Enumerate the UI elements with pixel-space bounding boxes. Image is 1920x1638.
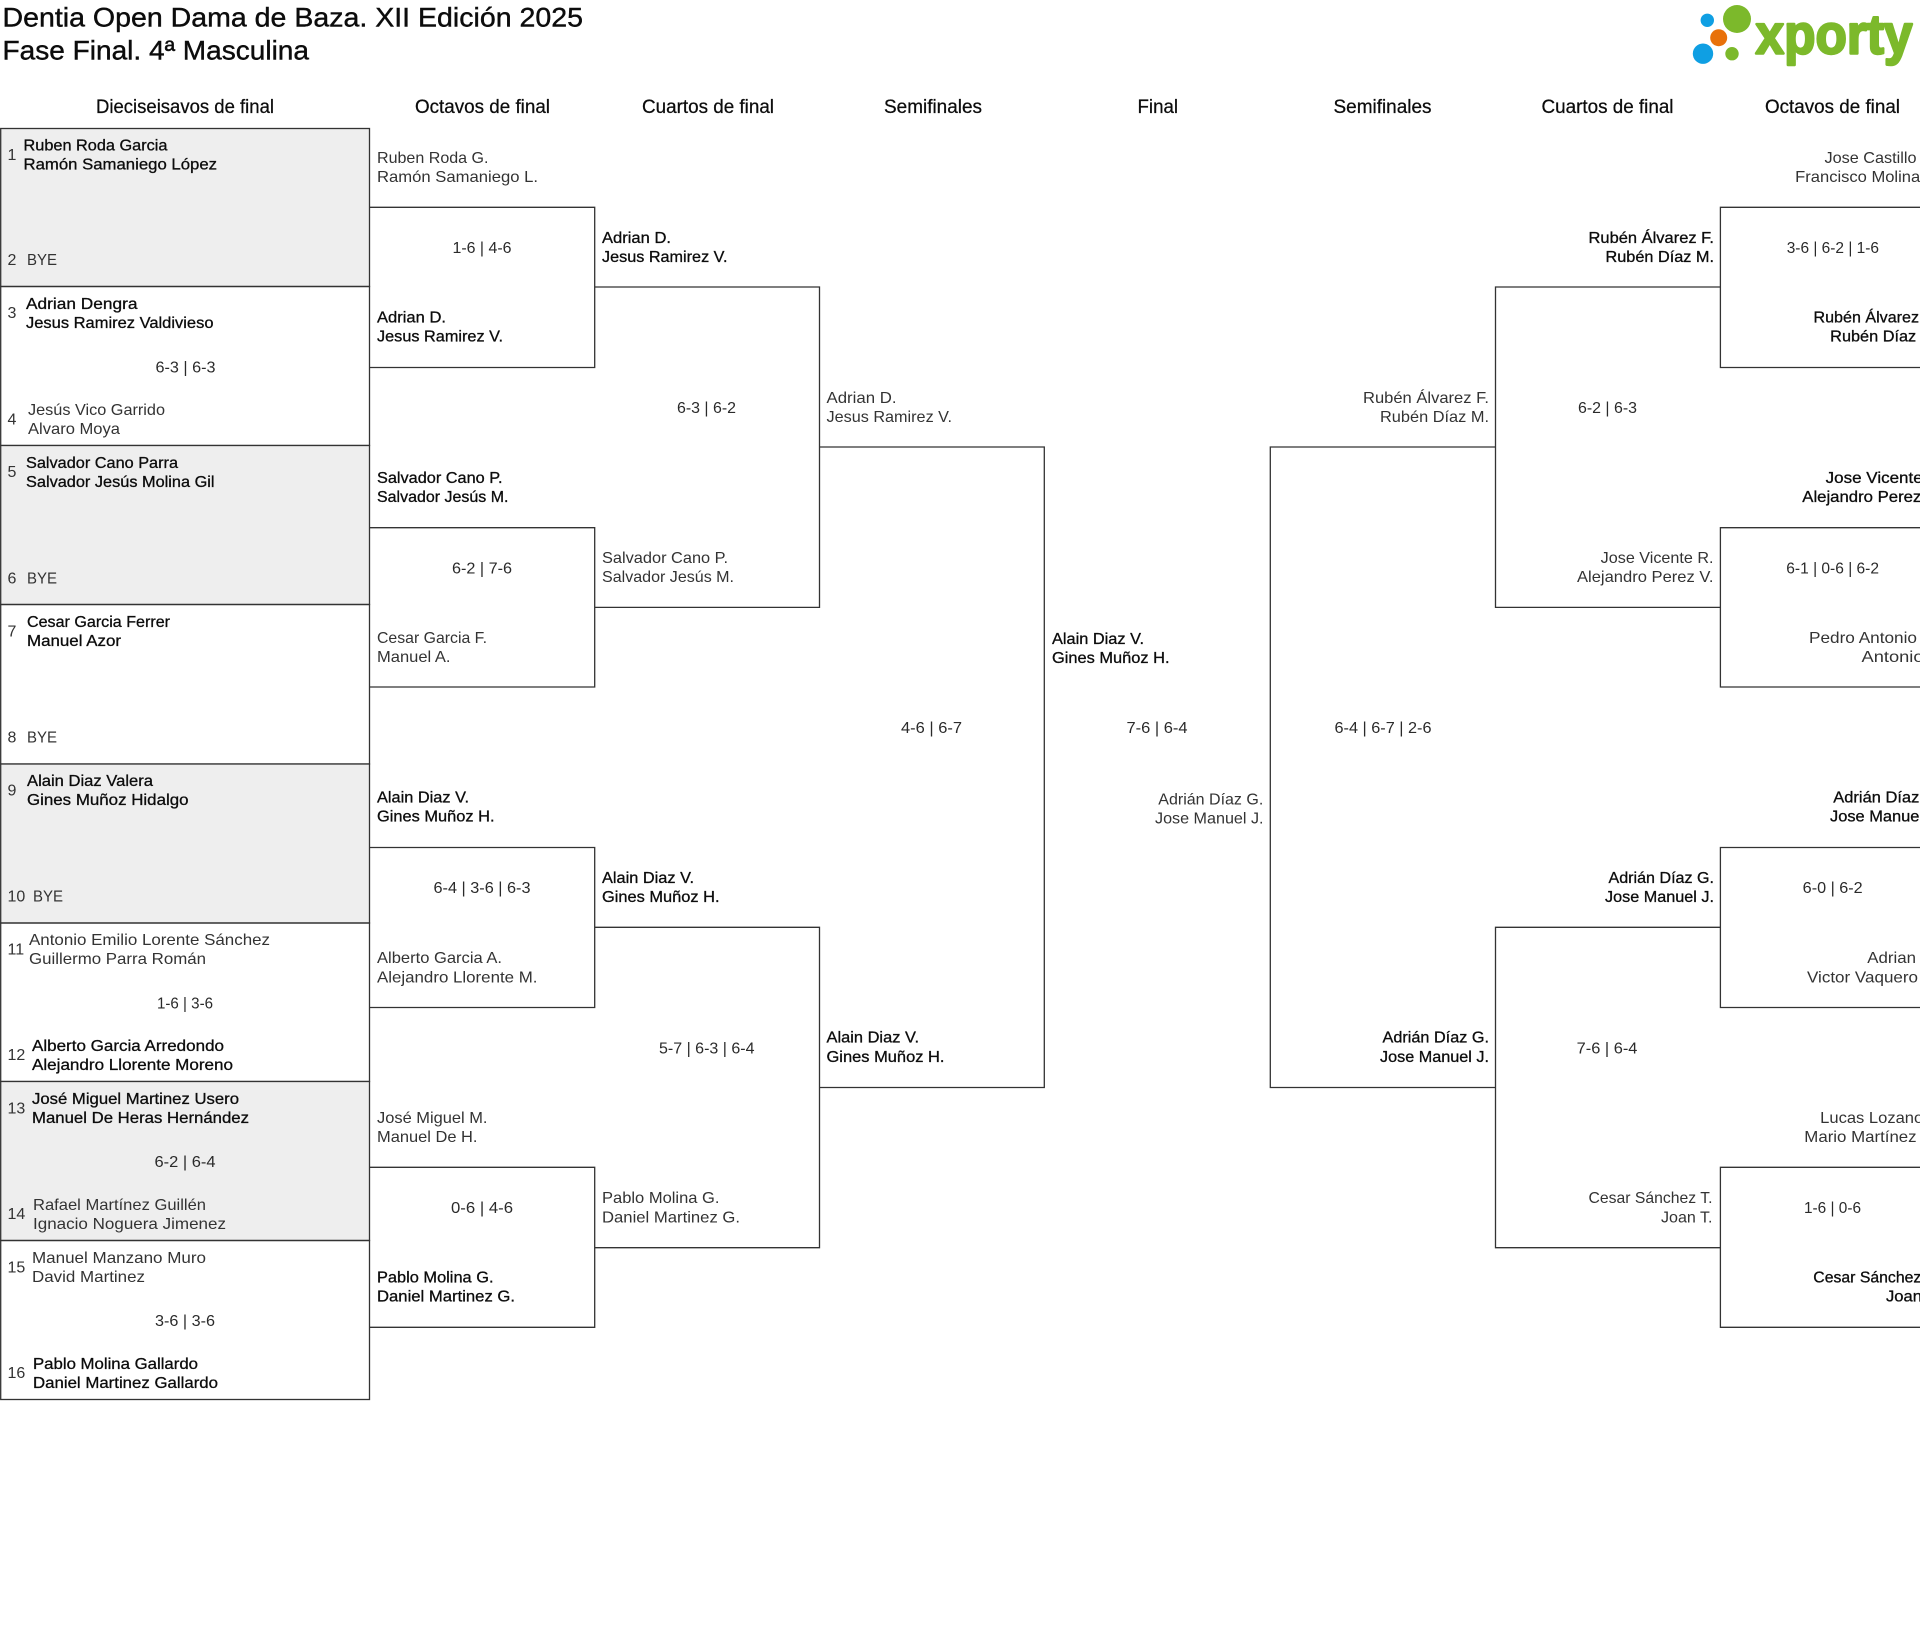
column: Semifinales (left): Jesus Ramirez V. [826,409,952,426]
match 5-6: 5 [8,464,16,481]
round headings: Cuartos de final [642,97,774,118]
match: Jose Castillo / Rubén Álvarez: Rubén Álvarez [1814,308,1919,326]
match: Adrián Díaz / Adrian [1720,790,1920,1008]
match 3-4: 6-3 | 6-3 [156,360,216,376]
match 5-6 [1,446,369,604]
match 7-8 [1,604,369,764]
match: Alain Diaz / Pablo Molina: Gines Muñoz H. [602,889,720,906]
match: Adrian D. / Salvador Cano: Salvador Jesús M. [602,569,734,586]
match: Ruben Roda / Adrian D. [370,150,595,368]
match 9-10: BYE [33,888,63,906]
match: Lucas Lozano / Cesar Sánchez: Joan [1886,1288,1920,1306]
match 11-12: Guillermo Parra Román [29,951,206,968]
match: Adrián Díaz / Cesar Sánchez: Cesar Sánchez T. [1588,1190,1712,1207]
column: Final: Jose Manuel J. [1155,810,1264,828]
match 3-4: Adrian Dengra [26,296,138,313]
match: Adrián Díaz / Cesar Sánchez: Adrián Díaz G. [1608,870,1714,887]
title: Dentia Open Dama de Baza. XII Edición 2025 [2,2,583,32]
match 13-14: Ignacio Noguera Jimenez [33,1216,226,1233]
match 11-12: 11 [8,942,24,958]
match: José Miguel / Pablo Molina: Pablo Molina G. [377,1270,494,1286]
match 11-12: Alberto Garcia Arredondo [32,1038,224,1055]
match: Alain Diaz / Pablo Molina: Alain Diaz V. [602,870,694,887]
round headings: Semifinales [1334,97,1432,118]
match: Salvador Cano / Cesar Garcia [370,470,595,687]
match 13-14 [1,1082,369,1240]
column: Semifinales (left): 4-6 | 6-7 [901,720,962,737]
column: Final: Adrián Díaz G. [1158,792,1263,808]
match: Alain Diaz / Alberto Garcia: Alberto Garcia A. [377,950,502,967]
match: Jose Castillo / Rubén Álvarez: Jose Castillo [1824,150,1917,167]
match: Rubén Álvarez / Jose Vicente [1496,228,1720,607]
match: Adrián Díaz / Adrian: Adrián Díaz [1833,790,1919,806]
match 11-12 [1,923,369,1082]
match: José Miguel / Pablo Molina [370,1110,595,1327]
match 13-14: 14 [8,1206,25,1223]
round headings: Semifinales [884,97,982,118]
match 5-6: Salvador Cano Parra [26,455,178,472]
column: Octavos de final (right) [1720,150,1920,1327]
match: Ruben Roda / Adrian D.: Ramón Samaniego L. [377,169,538,186]
match: Ruben Roda / Adrian D.: Jesus Ramirez V. [377,328,503,346]
column: Semifinales (right): Rubén Díaz M. [1380,409,1489,426]
match 15-16: Manuel Manzano Muro [32,1250,206,1267]
match 11-12: Antonio Emilio Lorente Sánchez [29,932,270,949]
column: Final [1052,631,1264,828]
match: Salvador Cano / Cesar Garcia: Salvador Cano P. [377,470,502,487]
round headings: Dieciseisavos de final [96,97,274,118]
match: Rubén Álvarez / Jose Vicente: 6-2 | 6-3 [1578,400,1637,417]
match 9-10: 10 [8,888,25,906]
match: Adrian D. / Salvador Cano: Salvador Cano P. [602,550,728,567]
match 3-4: Alvaro Moya [28,421,120,438]
column: Semifinales (left) [820,390,1044,1088]
match: Adrián Díaz / Cesar Sánchez: Jose Manuel J. [1605,889,1714,906]
match 3-4: 3 [8,305,16,322]
match 15-16: Pablo Molina Gallardo [33,1356,198,1373]
match 13-14: Rafael Martínez Guillén [33,1197,206,1214]
match 1-2: 1 [8,147,16,164]
column: Semifinales (right): Rubén Álvarez F. [1363,388,1489,407]
match: Jose Vicente / Pedro Antonio: 6-1 | 0-6 | 6-2 [1786,560,1879,578]
match: Jose Vicente / Pedro Antonio [1720,470,1920,687]
match 9-10 [1,764,369,923]
column: Final: Alain Diaz V. [1052,631,1144,648]
match 11-12: 12 [8,1047,25,1064]
match: Alain Diaz / Pablo Molina: Daniel Martinez G. [602,1210,740,1226]
match 11-12: Alejandro Llorente Moreno [32,1057,233,1074]
title: Fase Final. 4ª Masculina [2,36,310,66]
match: Alain Diaz / Alberto Garcia [370,790,595,1008]
match 3-4 [1,286,369,446]
match: Alain Diaz / Alberto Garcia: Alain Diaz V. [377,790,469,806]
column: Semifinales (right): Jose Manuel J. [1380,1049,1489,1066]
match 13-14: 13 [8,1100,25,1118]
match 1-2: Ruben Roda Garcia [24,138,168,154]
match 15-16: David Martinez [32,1269,145,1286]
match: Adrián Díaz / Adrian: Victor Vaquero [1807,970,1918,986]
match 1-2: Ramón Samaniego López [24,156,217,174]
match: Lucas Lozano / Cesar Sánchez: 1-6 | 0-6 [1804,1200,1861,1217]
match 7-8: BYE [27,730,57,746]
column: Semifinales (left): Adrian D. [826,390,896,407]
match 13-14: José Miguel Martinez Usero [32,1091,239,1108]
match: Rubén Álvarez / Jose Vicente: Rubén Álvarez F. [1588,228,1714,247]
match: Adrián Díaz / Cesar Sánchez: Joan T. [1661,1210,1712,1226]
match: Jose Vicente / Pedro Antonio: Antonio [1862,649,1920,666]
match: Jose Vicente / Pedro Antonio: Jose Vicente [1826,470,1920,487]
match: Adrián Díaz / Adrian: 6-0 | 6-2 [1803,880,1863,897]
match 15-16 [1,1240,369,1400]
match: Jose Castillo / Rubén Álvarez: Rubén Díaz [1830,328,1916,346]
match: Rubén Álvarez / Jose Vicente: Rubén Díaz M. [1606,249,1714,266]
match: Adrián Díaz / Adrian: Jose Manuel [1830,808,1920,826]
match: Adrián Díaz / Cesar Sánchez: 7-6 | 6-4 [1577,1040,1638,1058]
logo: xporty [1693,2,1912,66]
match: Lucas Lozano / Cesar Sánchez: Mario Martínez [1804,1129,1917,1146]
match: Alain Diaz / Pablo Molina [595,870,820,1248]
column: Final: 7-6 | 6-4 [1126,720,1188,737]
match: Ruben Roda / Adrian D.: Ruben Roda G. [377,150,488,167]
match: José Miguel / Pablo Molina: José Miguel M. [377,1110,488,1127]
column: Semifinales (right): Adrián Díaz G. [1382,1030,1489,1046]
match: Adrian D. / Salvador Cano: 6-3 | 6-2 [677,400,736,417]
match 15-16: 16 [8,1365,25,1382]
match: Adrián Díaz / Adrian: Adrian [1867,950,1916,967]
match: Adrián Díaz / Cesar Sánchez [1496,870,1720,1248]
match: Lucas Lozano / Cesar Sánchez [1720,1110,1920,1327]
match 9-10: 9 [8,782,16,800]
match: Jose Castillo / Rubén Álvarez: 3-6 | 6-2 | 1-6 [1787,240,1879,257]
match 1-2: 2 [8,252,16,269]
match: Salvador Cano / Cesar Garcia: Cesar Garcia F. [377,630,487,647]
column: Cuartos de final (right) [1496,228,1720,1248]
match 7-8: Manuel Azor [27,633,122,650]
match: Salvador Cano / Cesar Garcia: Salvador Jesús M. [377,489,508,506]
match: Jose Vicente / Pedro Antonio: Pedro Antonio [1809,630,1917,647]
match: José Miguel / Pablo Molina: Daniel Martinez G. [377,1288,515,1306]
match: Rubén Álvarez / Jose Vicente: Jose Vicente R. [1601,550,1714,567]
match: Lucas Lozano / Cesar Sánchez: Lucas Lozano [1820,1110,1920,1127]
column: Final: Gines Muñoz H. [1052,650,1170,667]
match: Jose Castillo / Rubén Álvarez [1720,150,1920,368]
match: Alain Diaz / Alberto Garcia: Alejandro Llorente M. [377,970,538,986]
column: Semifinales (right): 6-4 | 6-7 | 2-6 [1334,720,1432,737]
match 3-4: 4 [8,412,16,428]
match: José Miguel / Pablo Molina: 0-6 | 4-6 [451,1200,513,1217]
match: Ruben Roda / Adrian D.: 1-6 | 4-6 [452,240,512,257]
match: Alain Diaz / Alberto Garcia: 6-4 | 3-6 | 6-3 [434,880,531,897]
match 13-14: Manuel De Heras Hernández [32,1110,249,1127]
column: Semifinales (left): Gines Muñoz H. [826,1049,944,1066]
round headings [96,97,1900,118]
column: Octavos de final (left) [370,150,595,1327]
match: Salvador Cano / Cesar Garcia: Manuel A. [377,649,450,666]
match 9-10: Gines Muñoz Hidalgo [27,792,189,809]
match 11-12: 1-6 | 3-6 [157,996,213,1012]
match: Rubén Álvarez / Jose Vicente: Alejandro Perez V. [1577,569,1714,586]
match: Alain Diaz / Pablo Molina: 5-7 | 6-3 | 6-4 [659,1040,755,1058]
match 3-4: Jesus Ramirez Valdivieso [26,315,214,332]
match 5-6: Salvador Jesús Molina Gil [26,474,214,491]
match: Alain Diaz / Pablo Molina: Pablo Molina G. [602,1190,720,1207]
round headings: Octavos de final [1765,97,1900,118]
match 5-6: 6 [8,570,16,588]
match: Jose Vicente / Pedro Antonio: Alejandro Perez [1802,489,1920,506]
match 13-14: 6-2 | 6-4 [154,1154,216,1171]
match: Adrian D. / Salvador Cano [595,230,820,607]
round headings: Octavos de final [415,97,550,118]
match 7-8: 8 [8,730,16,746]
match 1-2: BYE [27,252,57,269]
match: Alain Diaz / Alberto Garcia: Gines Muñoz H. [377,808,494,826]
match: Adrian D. / Salvador Cano: Jesus Ramirez V. [602,249,728,266]
title [2,2,583,66]
column: Semifinales (right) [1270,388,1496,1088]
match: José Miguel / Pablo Molina: Manuel De H. [377,1129,478,1146]
match: Jose Castillo / Rubén Álvarez: Francisco Molina [1795,169,1920,186]
match 1-2 [1,128,369,286]
match 5-6: BYE [27,570,57,588]
match: Lucas Lozano / Cesar Sánchez: Cesar Sánchez [1813,1270,1920,1286]
match 15-16: 3-6 | 3-6 [155,1313,215,1330]
column: Dieciseisavos de final [1,128,369,1400]
round headings: Final [1138,97,1178,118]
match: Salvador Cano / Cesar Garcia: 6-2 | 7-6 [452,560,512,578]
match 15-16: 15 [8,1260,25,1276]
column: Semifinales (left): Alain Diaz V. [826,1030,919,1046]
round headings: Cuartos de final [1542,97,1674,118]
column: Cuartos de final (left) [595,230,820,1248]
match 15-16: Daniel Martinez Gallardo [33,1375,218,1392]
match 7-8: 7 [8,624,16,640]
match: Adrian D. / Salvador Cano: Adrian D. [602,230,671,247]
match 3-4: Jesús Vico Garrido [28,402,165,419]
match: Ruben Roda / Adrian D.: Adrian D. [377,310,446,326]
match 7-8: Cesar Garcia Ferrer [27,614,171,631]
match 9-10: Alain Diaz Valera [27,773,153,790]
